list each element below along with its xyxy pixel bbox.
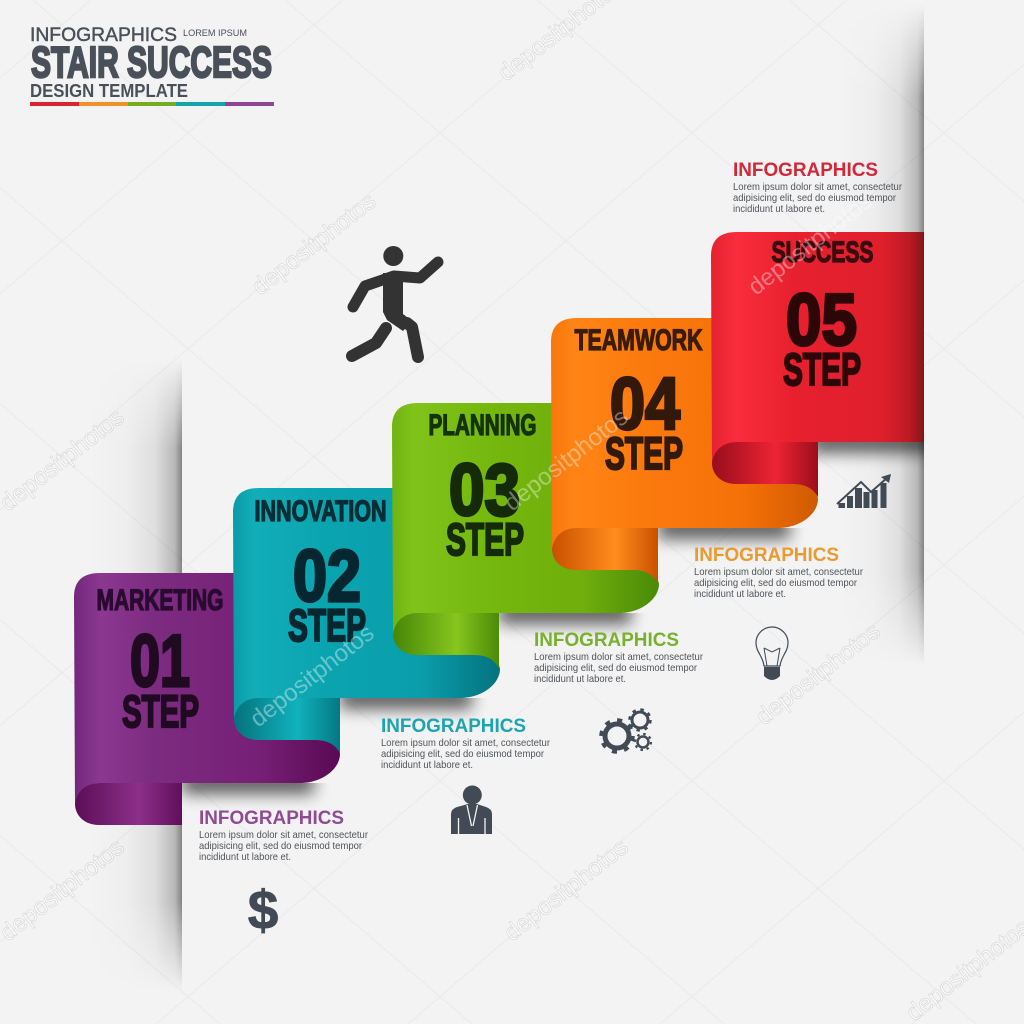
icon: businessman bbox=[451, 786, 492, 834]
text block: step 2: INFOGRAPHICS bbox=[381, 716, 526, 737]
step 2: innovation: 02 bbox=[293, 536, 361, 617]
watermark on panels bbox=[245, 187, 877, 733]
text block: step 5: adipisicing elit, sed do eiusmod tempor bbox=[733, 192, 896, 204]
step 2: innovation bbox=[233, 488, 500, 753]
watermark on panels: depositphotos bbox=[245, 619, 379, 733]
watermark on panels: depositphotos bbox=[499, 403, 633, 517]
watermark on panels: depositphotos bbox=[743, 187, 877, 301]
text block: step 3 bbox=[534, 630, 703, 685]
step 4: teamwork: TEAMWORK bbox=[574, 324, 703, 357]
watermark on background: depositphotos bbox=[751, 617, 885, 731]
text block: step 4: Lorem ipsum dolor sit amet, consectetur bbox=[694, 566, 863, 578]
text block: step 5: incididunt ut labore et. bbox=[733, 203, 825, 215]
header title bbox=[30, 24, 274, 106]
icon: light bulb bbox=[756, 627, 788, 680]
step 3: planning: STEP bbox=[446, 514, 524, 565]
step 3: planning: 03 bbox=[449, 450, 520, 531]
step 3: planning bbox=[392, 403, 659, 668]
text block: step 4: incididunt ut labore et. bbox=[694, 588, 786, 600]
step 1: marketing: STEP bbox=[122, 686, 199, 737]
header title: LOREM IPSUM bbox=[183, 28, 247, 39]
step 5: success: 05 bbox=[786, 280, 857, 361]
text block: step 4: adipisicing elit, sed do eiusmod tempor bbox=[694, 577, 857, 589]
text block: step 5: INFOGRAPHICS bbox=[733, 160, 878, 181]
step 1: marketing: MARKETING bbox=[96, 584, 224, 617]
text block: step 2: adipisicing elit, sed do eiusmod tempor bbox=[381, 748, 544, 760]
watermark on background: depositphotos bbox=[247, 187, 381, 301]
text block: step 1: INFOGRAPHICS bbox=[199, 808, 344, 829]
step 1: marketing bbox=[74, 573, 340, 825]
text block: step 1: adipisicing elit, sed do eiusmod tempor bbox=[199, 840, 362, 852]
header title: DESIGN TEMPLATE bbox=[30, 81, 188, 101]
text block: step 3: incididunt ut labore et. bbox=[534, 673, 626, 685]
step 4: teamwork: 04 bbox=[610, 364, 680, 445]
step 4: teamwork: STEP bbox=[605, 428, 683, 479]
text block: step 4 bbox=[694, 545, 863, 600]
text block: step 4: INFOGRAPHICS bbox=[694, 545, 839, 566]
text block: step 2: incididunt ut labore et. bbox=[381, 759, 473, 771]
watermark on background: depositphotos bbox=[499, 833, 633, 947]
text block: step 2 bbox=[381, 716, 550, 771]
text block: step 5: Lorem ipsum dolor sit amet, consectetur bbox=[733, 181, 902, 193]
step 1: marketing: 01 bbox=[130, 621, 190, 702]
icon: running man bbox=[352, 246, 438, 357]
text block: step 5 bbox=[733, 160, 902, 215]
step 2: innovation: STEP bbox=[288, 600, 366, 651]
step 5: success: STEP bbox=[783, 344, 861, 395]
text block: step 2: Lorem ipsum dolor sit amet, consectetur bbox=[381, 737, 550, 749]
text block: step 1: incididunt ut labore et. bbox=[199, 851, 291, 863]
step 5: success bbox=[711, 232, 924, 497]
text block: step 1: Lorem ipsum dolor sit amet, consectetur bbox=[199, 829, 368, 841]
step 4: teamwork bbox=[551, 318, 818, 583]
header title: INFOGRAPHICS bbox=[30, 24, 177, 46]
text block: step 3: INFOGRAPHICS bbox=[534, 630, 679, 651]
header title: STAIR SUCCESS bbox=[31, 38, 272, 87]
step 3: planning: PLANNING bbox=[428, 409, 536, 442]
text block: step 3: Lorem ipsum dolor sit amet, consectetur bbox=[534, 651, 703, 663]
icon: gears bbox=[602, 710, 651, 752]
text block: step 1 bbox=[199, 808, 368, 863]
icon: dollar: $ bbox=[248, 879, 278, 941]
text block: step 3: adipisicing elit, sed do eiusmod tempor bbox=[534, 662, 697, 674]
icon: growth chart bbox=[837, 474, 891, 508]
step 5: success: SUCCESS bbox=[772, 236, 874, 269]
step 2: innovation: INNOVATION bbox=[254, 495, 386, 528]
